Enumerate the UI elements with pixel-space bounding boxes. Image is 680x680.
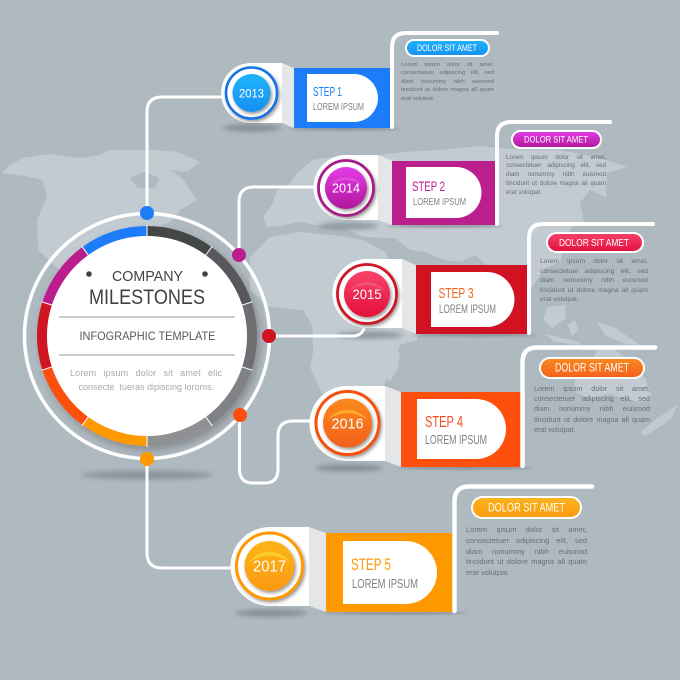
body text: step 3: Lorem ipsum dolor sit amet, (540, 258, 648, 265)
step title: STEP 1 (313, 84, 342, 99)
new zealand (640, 405, 677, 436)
bracket (497, 122, 610, 224)
body text: step 3: diam nonummy nibh euismod (540, 277, 648, 284)
step 1 card (221, 33, 497, 128)
label pill (406, 40, 489, 56)
year badge: 2013 (239, 86, 264, 100)
africa (250, 232, 420, 410)
description (70, 368, 222, 392)
colour panel (392, 161, 497, 225)
label pill: DOLOR SIT AMET (559, 237, 629, 249)
body text: step 3: consectetuer adipiscing elit, sed (540, 268, 648, 275)
eurasia (263, 146, 627, 300)
body text: step 5: Lorem ipsum dolor sit amet, (466, 525, 587, 534)
step title: STEP 3 (438, 285, 474, 302)
capsule (332, 259, 402, 328)
description: consecte tueras dipiscing loroms. (78, 382, 214, 392)
white tab (431, 272, 514, 327)
indonesia (543, 305, 640, 345)
body text: step 5: erat volutpat. (466, 568, 509, 577)
label pill: DOLOR SIT AMET (524, 134, 588, 146)
body text: step 3: erat volutpat. (540, 296, 579, 303)
world map background (2, 146, 677, 436)
step subtitle: LOREM IPSUM (313, 102, 364, 113)
label pill: DOLOR SIT AMET (555, 362, 629, 374)
bracket (392, 33, 497, 127)
year badge (318, 160, 374, 216)
colour panel (401, 392, 522, 467)
year badge (316, 392, 379, 454)
body text: step 5: tincidunt ut dolore magna all quam (466, 557, 587, 566)
year badge (338, 264, 396, 324)
year badge: 2015 (352, 286, 382, 302)
label pill (540, 358, 644, 378)
body text: step 2: diam nonummy nibh euismod (506, 171, 606, 178)
fold (378, 155, 392, 225)
body text: step 2: tincidunt ut dolore magna all quam (506, 180, 606, 187)
body text: step 1: consectetuer adipiscing elit, sed (401, 70, 494, 76)
label pill: DOLOR SIT AMET (488, 500, 566, 514)
body text: step 4: consectetuer adipiscing elit, sed (534, 394, 650, 403)
capsule (230, 527, 309, 606)
white disc (47, 236, 247, 436)
colour panel (416, 265, 529, 334)
description: Lorem ipsum dolor sit amet elic (70, 368, 222, 378)
year badge: 2016 (332, 416, 364, 432)
step subtitle: LOREM IPSUM (413, 196, 466, 208)
year badge: 2017 (253, 558, 286, 576)
body text: step 1: erat volutpat. (401, 96, 435, 102)
bracket (522, 348, 655, 466)
north america (2, 150, 200, 280)
bullet dots (86, 271, 208, 277)
capsule (314, 155, 378, 220)
step 3 card (332, 224, 653, 334)
body text: step 5: diam nonummy nibh euismod (466, 547, 587, 556)
madagascar (386, 352, 400, 382)
body text: step 3 (540, 258, 648, 303)
heading: company: COMPANY (112, 268, 183, 285)
colour panel (326, 533, 454, 612)
body text: step 2: erat volutpat. (506, 189, 542, 196)
body text: step 1: tincidunt ut dolore magna all quam (401, 87, 494, 93)
step title: STEP 5 (351, 555, 391, 574)
white tab (406, 167, 482, 218)
white tab (307, 74, 378, 122)
outer ring (24, 214, 270, 458)
colour panel (294, 68, 391, 128)
body text: step 4 (534, 384, 650, 434)
label pill (512, 131, 601, 148)
capsule (221, 63, 282, 123)
body text: step 5: consectetuer adipiscing elit, sed (466, 536, 587, 545)
step 2 card (314, 122, 610, 225)
label pill (472, 497, 581, 518)
body text: step 1 (401, 62, 494, 102)
bracket (454, 486, 592, 611)
ground shadows (81, 124, 537, 616)
year badge (236, 533, 302, 599)
connector lines (147, 97, 364, 568)
body text: step 1: Lorem ipsum dolor sit amet, (401, 62, 494, 68)
bracket (529, 224, 653, 333)
fold (402, 259, 416, 334)
step 4 card (310, 348, 655, 467)
step subtitle: LOREM IPSUM (425, 433, 487, 447)
step title: STEP 4 (425, 414, 463, 431)
fold (385, 386, 401, 467)
step subtitle: LOREM IPSUM (439, 304, 496, 316)
australia (575, 348, 652, 402)
body text: step 2: consectetuer adipiscing elit, sed (506, 162, 606, 169)
label pill (547, 233, 643, 252)
heading: milestones: MILESTONES (89, 286, 205, 309)
body text: step 4: diam nonummy nibh euismod (534, 404, 650, 413)
fold (282, 63, 294, 128)
main milestones circle (24, 214, 270, 458)
fold (309, 527, 326, 612)
body text: step 4: Lorem ipsum dolor sit amet, (534, 384, 650, 393)
body text: step 4: erat volutpat. (534, 425, 576, 434)
body text: step 2 (506, 154, 606, 196)
node dots (140, 206, 276, 466)
year badge (226, 68, 277, 118)
step 5 card (230, 486, 592, 612)
segmented ring (42, 231, 252, 441)
body text: step 3: tincidunt ut dolore magna all quam (540, 287, 648, 294)
body text: step 5 (466, 525, 587, 577)
white tab (417, 399, 506, 459)
step subtitle: LOREM IPSUM (352, 576, 418, 591)
year badge: 2014 (332, 180, 360, 196)
step title: STEP 2 (412, 178, 445, 194)
body text: step 1: diam nonummy nibh euismod (401, 79, 494, 85)
label pill: DOLOR SIT AMET (417, 43, 477, 53)
capsule (310, 386, 385, 461)
body text: step 4: tincidunt ut dolore magna all quam (534, 415, 650, 424)
white tab (343, 541, 437, 604)
subtitle: INFOGRAPHIC TEMPLATE (80, 329, 216, 343)
body text: step 2: Lorem ipsum dolor sit amet, (506, 154, 606, 160)
